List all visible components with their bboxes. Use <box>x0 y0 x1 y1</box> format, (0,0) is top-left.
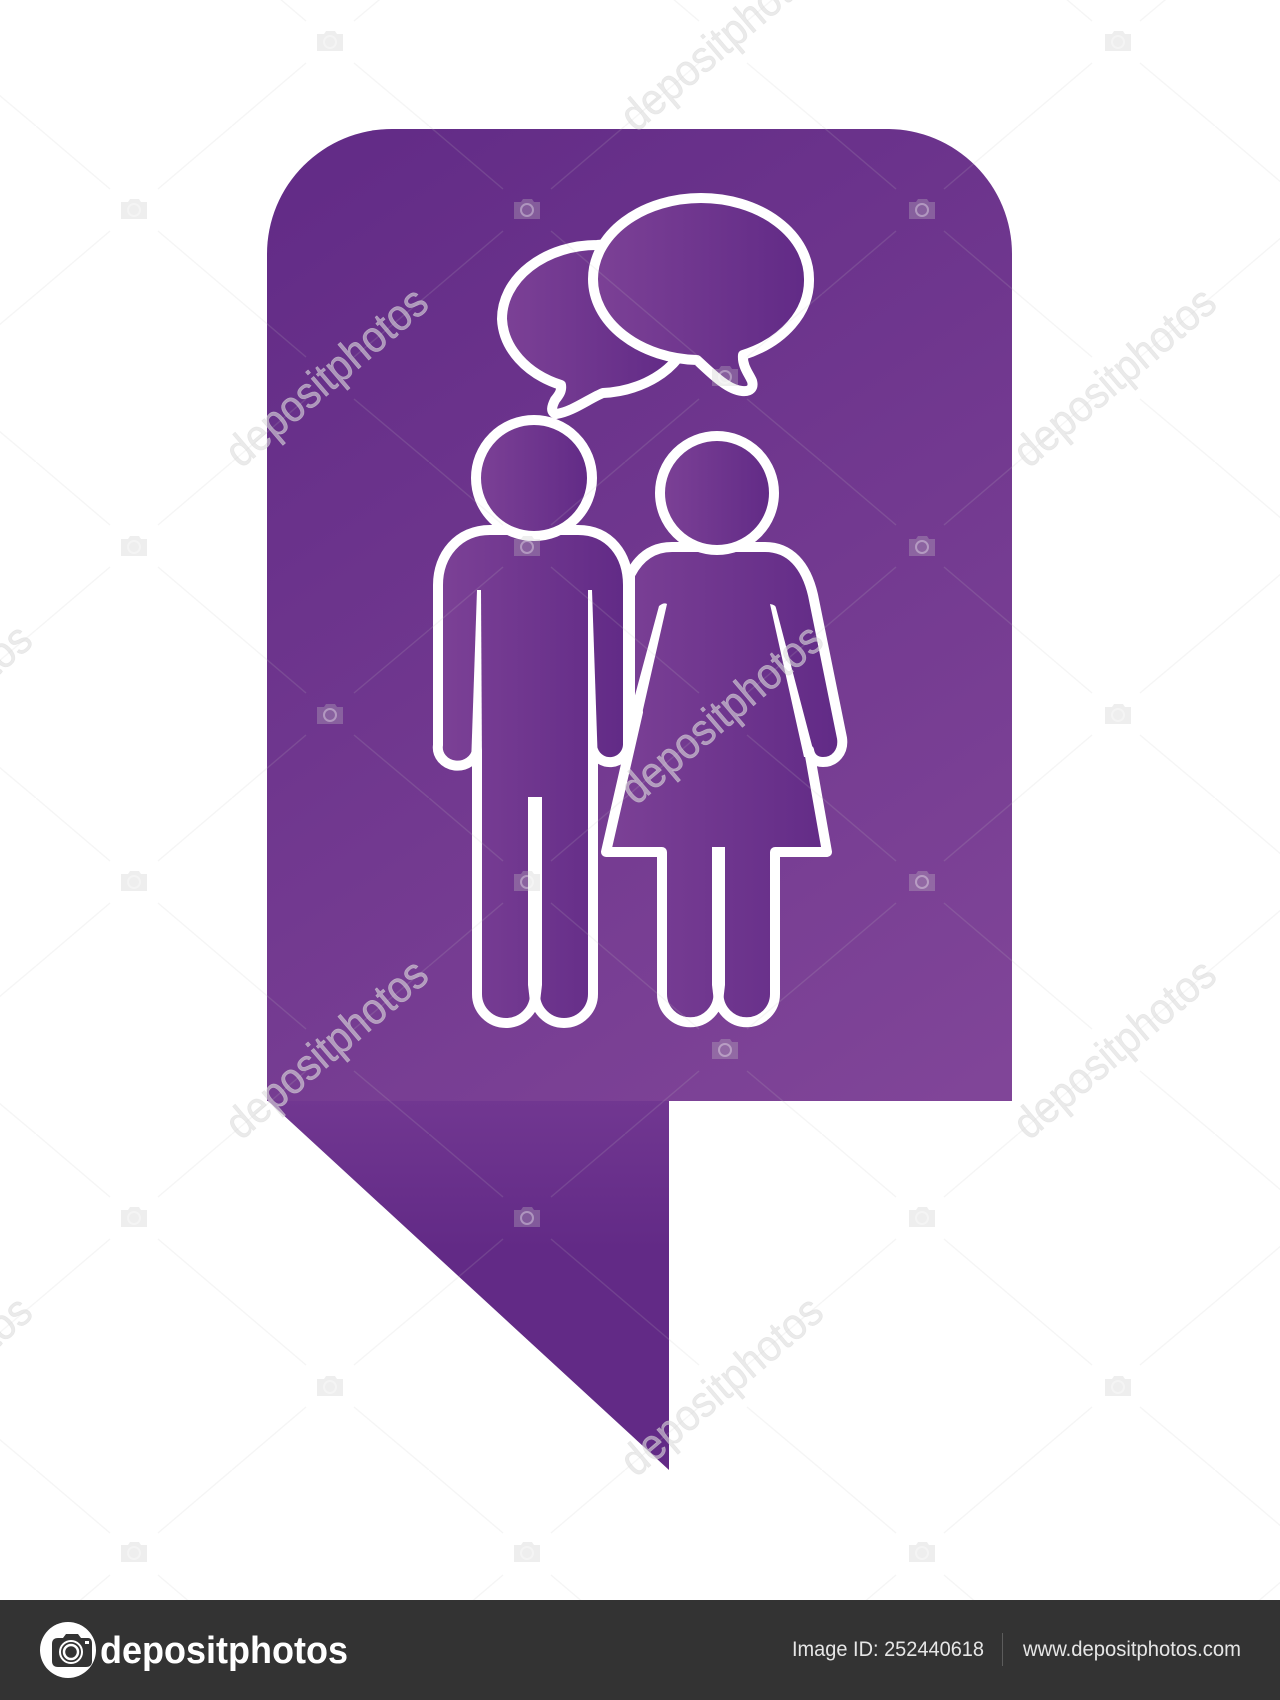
footer logo wordmark: depositphotos <box>100 1630 348 1672</box>
woman figure <box>606 436 842 1022</box>
footer bar <box>0 1600 1280 1700</box>
watermark camera icons <box>121 31 1131 1562</box>
diagonal watermark text: depositphotos <box>611 1286 833 1486</box>
woman head <box>660 436 774 550</box>
man body <box>438 530 628 1023</box>
image id text: Image ID: 252440618 <box>792 1638 984 1661</box>
large speech bubble <box>593 198 809 391</box>
diagonal watermark text: depositphotos <box>1004 949 1226 1149</box>
diagonal watermark text: depositphotos <box>216 277 438 477</box>
man inner arm lines and leg gap <box>471 590 598 1002</box>
footer divider <box>1002 1633 1003 1666</box>
map pin marker <box>267 129 1012 1470</box>
pin body panel <box>267 129 1012 1101</box>
man figure <box>438 420 628 1023</box>
pin tail <box>267 1100 669 1470</box>
website url text: www.depositphotos.com <box>1022 1638 1241 1661</box>
speech bubbles <box>502 198 809 414</box>
woman body and dress <box>606 547 842 1022</box>
man head <box>476 420 592 536</box>
small speech bubble <box>502 240 678 414</box>
woman inner arm lines and leg gap <box>630 603 815 1002</box>
diagonal watermark text: depositphotos <box>1004 277 1226 477</box>
diagonal watermark text: depositphotos <box>611 614 833 814</box>
diagonal watermark text: depositphotos <box>216 949 438 1149</box>
footer logo icon: camera in circle <box>40 1622 96 1678</box>
